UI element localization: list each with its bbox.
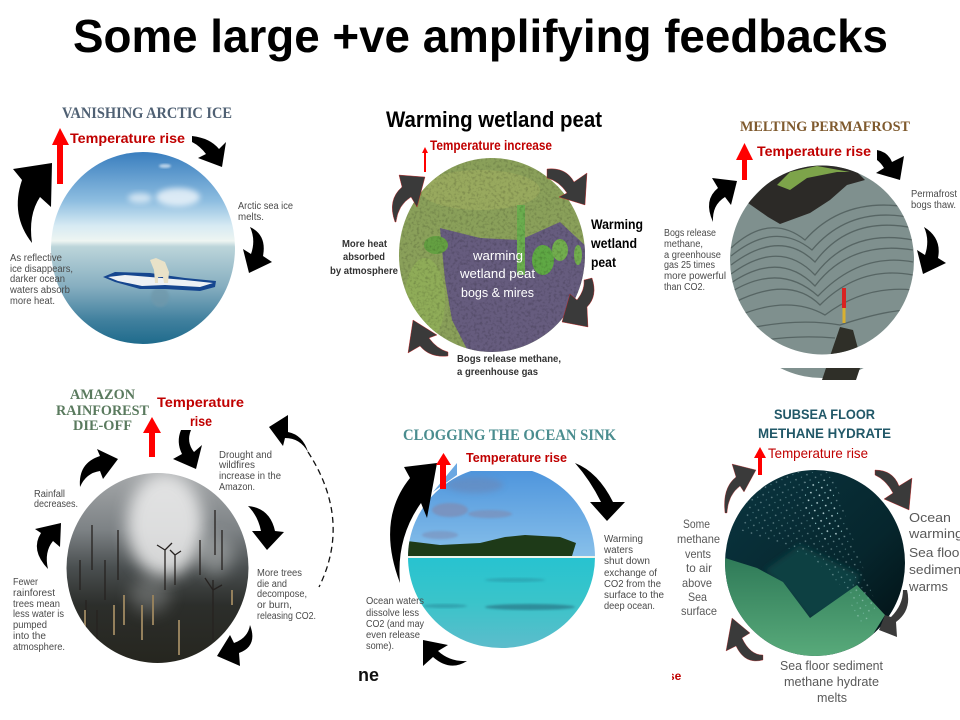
arrow: top left [724,464,756,513]
text: fewer rainforest trees: atmosphere. [13,642,65,653]
text: ocean warming: Sea floor [909,545,960,560]
panel: melting permafrost [664,119,957,380]
text: warming waters: exchange of [604,568,657,579]
text: more heat absorbed [330,238,398,277]
text: permafrost bogs thaw: Permafrost [911,189,957,200]
text: sea floor sediment: methane hydrate [784,674,879,689]
label: temperature rise: Temperature rise [768,445,868,461]
text: fewer rainforest trees: less water is [13,609,64,620]
arrow: lower right [562,278,594,327]
text: fewer rainforest trees: pumped [13,620,47,631]
text: ocean waters dissolve: Ocean waters [366,596,424,607]
photo caption: bogs & mires [461,285,534,300]
text: some methane vents: methane [677,532,720,546]
white label panel [457,448,582,471]
text: some methane vents: Some [683,517,710,531]
text: warming waters: CO2 from the [604,579,661,590]
photo: methane bubbles on sea floor [724,469,906,660]
text: bogs release methane: than CO2. [664,282,705,293]
text: permafrost bogs thaw: bogs thaw. [911,200,956,211]
text: more trees die [257,568,316,622]
arrow: right [917,227,946,274]
arrow: temperature up [52,128,69,184]
heading: MELTING PERMAFROST [740,119,910,135]
text: warming wetland peat: wetland [590,235,637,251]
text: rainfall decreases: Rainfall [34,489,65,500]
text: rainfall decreases [34,489,78,510]
heading [56,387,149,434]
text: drought and wildfires [218,450,281,493]
heading: Warming wetland peat [386,107,603,132]
heading: VANISHING ARCTIC ICE [62,105,232,122]
heading: METHANE HYDRATE [758,425,891,441]
text: more trees die: decompose, [257,589,307,600]
text: more heat absorbed: by atmosphere [330,265,398,277]
text: fewer rainforest trees: rainforest [13,588,55,599]
text: ocean waters dissolve: dissolve less [366,608,419,619]
text: warming waters: shut down [604,556,650,567]
photo: lower sliver of permafrost image [780,368,864,380]
text: reflective ice disappears [9,253,73,307]
arrow: bottom [217,625,252,666]
label: temperature rise: rise [190,413,212,429]
label: temperature rise: Temperature [157,394,244,410]
text: bogs release methane [457,353,561,378]
text: warming waters [603,534,664,612]
text: some methane vents: Sea [688,590,707,604]
arrow: temperature up [754,447,766,475]
heading: AMAZON [70,387,135,403]
panel: subsea floor methane hydrate [677,406,960,705]
arrow: top right [575,463,625,521]
text: fewer rainforest trees: Fewer [13,577,39,588]
text: fewer rainforest trees: trees mean [13,599,60,610]
text: bogs release methane: Bogs release [664,228,716,239]
text: bogs release methane: Bogs release methane, [457,353,561,365]
text: fewer rainforest trees [13,577,65,653]
text: ocean waters dissolve [366,596,424,652]
text: reflective ice disappears: darker ocean [10,274,65,285]
text: reflective ice disappears: ice disappears, [10,264,73,275]
heading: CLOGGING THE OCEAN SINK [403,427,617,444]
arrow: big left [390,463,437,583]
text: ocean waters dissolve: CO2 (and may [366,619,424,630]
arrow: top right [875,470,912,510]
arrow: left [709,178,737,222]
arrow: top left [392,175,425,222]
text fragment: clipped red letters: se [668,669,682,683]
text: some methane vents: surface [681,604,717,618]
arrow: upper left [80,449,118,487]
text: sea floor sediment: melts [817,690,847,705]
arrow: back to temperature [13,163,52,243]
photo caption: wetland peat [459,266,535,281]
arrow: top [173,430,202,469]
text: bogs release methane: methane, [664,239,703,250]
panel: vanishing Arctic ice [9,105,293,345]
label: temperature rise: Temperature rise [70,130,185,146]
text: Arctic sea ice melts: melts. [238,212,264,223]
text: some methane vents: vents [685,547,711,561]
arrow: bottom left [408,320,448,356]
text: ocean warming: warming [908,526,960,541]
arrow: temperature up [422,147,428,172]
arrow: bottom left [726,618,763,661]
text: more trees die: More trees [257,568,302,579]
text: drought and wildfires: Drought and [219,450,272,461]
text: Arctic sea ice melts [238,201,293,223]
panel: warming wetland peat [330,107,643,378]
text: more trees die: releasing CO2. [257,611,316,622]
text fragment: clipped black letters: ne [358,665,379,685]
arrow: temperature up [736,143,753,180]
photo caption: warming [472,248,523,263]
arrow: dashed feedback to temperature [269,415,333,587]
arrow: top right [547,169,587,205]
text: warming waters: surface to the [604,590,664,601]
text: some methane vents: to air [686,561,712,575]
photo: permafrost cliff [729,165,915,356]
text: reflective ice disappears: waters absorb [9,285,70,296]
text: more trees die: die and [257,579,287,590]
text: warming waters: waters [603,545,633,556]
text: sea floor sediment [780,658,883,705]
arrow: top right [876,150,904,180]
text: Arctic sea ice melts: Arctic sea ice [238,201,293,212]
text: more trees die: or burn, [257,600,292,611]
text: warming wetland peat: peat [591,254,616,270]
arrow: right lower [879,590,908,637]
text: drought and wildfires: wildfires [218,460,255,471]
panel: clogging the ocean sink [366,427,664,666]
text: some methane vents: above [682,576,712,590]
text: drought and wildfires: increase in the [219,471,281,482]
photo: polar bear on ice floe [51,152,235,345]
photo: wetland peat bog [398,157,590,355]
photo caption [459,248,535,300]
label: temperature rise [157,394,244,429]
text: rainfall decreases: decreases. [34,499,78,510]
text: ocean warming [908,510,960,594]
arrow: right [248,506,284,550]
text: warming wetland peat: Warming [591,216,643,232]
heading: RAINFOREST [56,403,149,419]
text: fewer rainforest trees: into the [13,631,46,642]
text: warming wetland peat [590,216,643,270]
text: reflective ice disappears: more heat. [10,296,55,307]
text: sea floor sediment: Sea floor sediment [780,658,883,673]
heading: SUBSEA FLOOR [774,406,875,422]
arrow: temperature up [143,417,161,457]
text: ocean waters dissolve: even release [366,630,420,641]
text: ocean waters dissolve: some). [366,641,394,652]
arrow: temperature up [436,453,451,489]
label: temperature rise: Temperature rise [757,143,871,159]
arrow: to sea ice melts [192,136,226,167]
text: warming waters: Warming [604,534,643,545]
text: warming waters: deep ocean. [604,601,655,612]
arrow: from sea ice melts [243,227,272,273]
arrow: bottom [423,640,467,666]
photo: tropical island [407,463,596,648]
text: more heat absorbed: absorbed [343,251,385,263]
arrow: lower left [35,523,61,569]
photo: burning forest [66,472,250,664]
text: drought and wildfires: Amazon. [219,482,255,493]
text: ocean warming: warms [908,579,949,594]
text: bogs release methane [664,228,726,293]
text: bogs release methane: gas 25 times [664,260,715,271]
heading [758,406,891,441]
text: some methane vents [677,517,720,618]
text: bogs release methane: more powerful [664,271,726,282]
text: permafrost bogs thaw [911,189,957,211]
label: temperature increase: Temperature increase [430,138,552,153]
heading: DIE-OFF [73,418,132,434]
panel: Amazon rainforest die-off [13,387,333,666]
text: bogs release methane: a greenhouse [664,250,721,261]
label: temperature rise: Temperature rise [466,450,567,465]
text: reflective ice disappears: As reflective [10,253,62,264]
text: ocean warming: Ocean [909,510,951,525]
text: more heat absorbed: More heat [342,238,387,250]
title: Some large +ve amplifying feedbacks [73,10,888,62]
text: bogs release methane: a greenhouse gas [457,366,538,378]
